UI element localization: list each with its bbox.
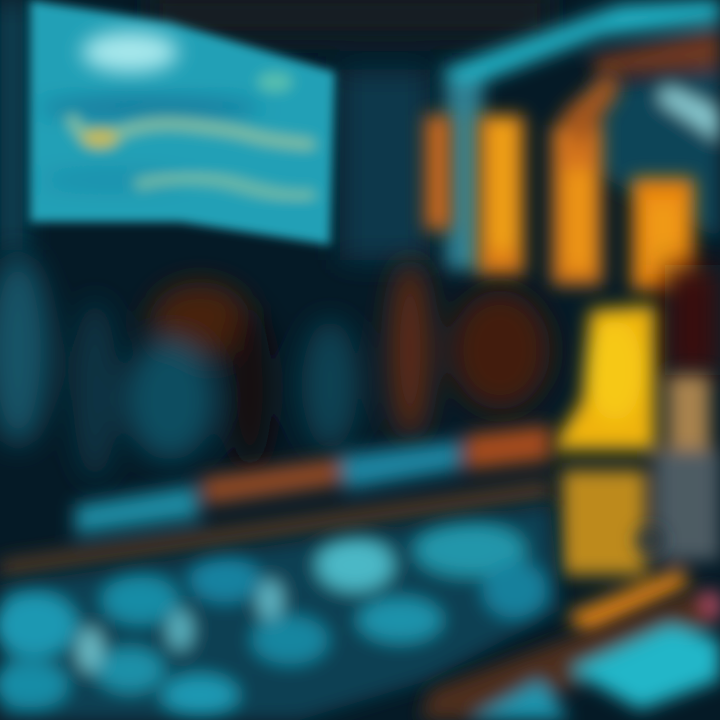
- screen highlight: [82, 32, 178, 72]
- top right cyan beam: [440, 0, 720, 270]
- screen darker band: [40, 94, 260, 122]
- mid section dark figures: [0, 255, 720, 480]
- keyboard keys: [0, 593, 77, 657]
- top dark band: [0, 0, 550, 260]
- lower right corner: [420, 528, 720, 720]
- desk strip: [0, 425, 550, 578]
- orange panels: [425, 70, 694, 290]
- chart line upper: [70, 115, 315, 145]
- chart accent: [82, 128, 118, 148]
- yellow glow: [550, 305, 720, 638]
- main monitor screen: [30, 0, 335, 245]
- chart line lower: [135, 178, 315, 196]
- keyboard area: [0, 505, 560, 720]
